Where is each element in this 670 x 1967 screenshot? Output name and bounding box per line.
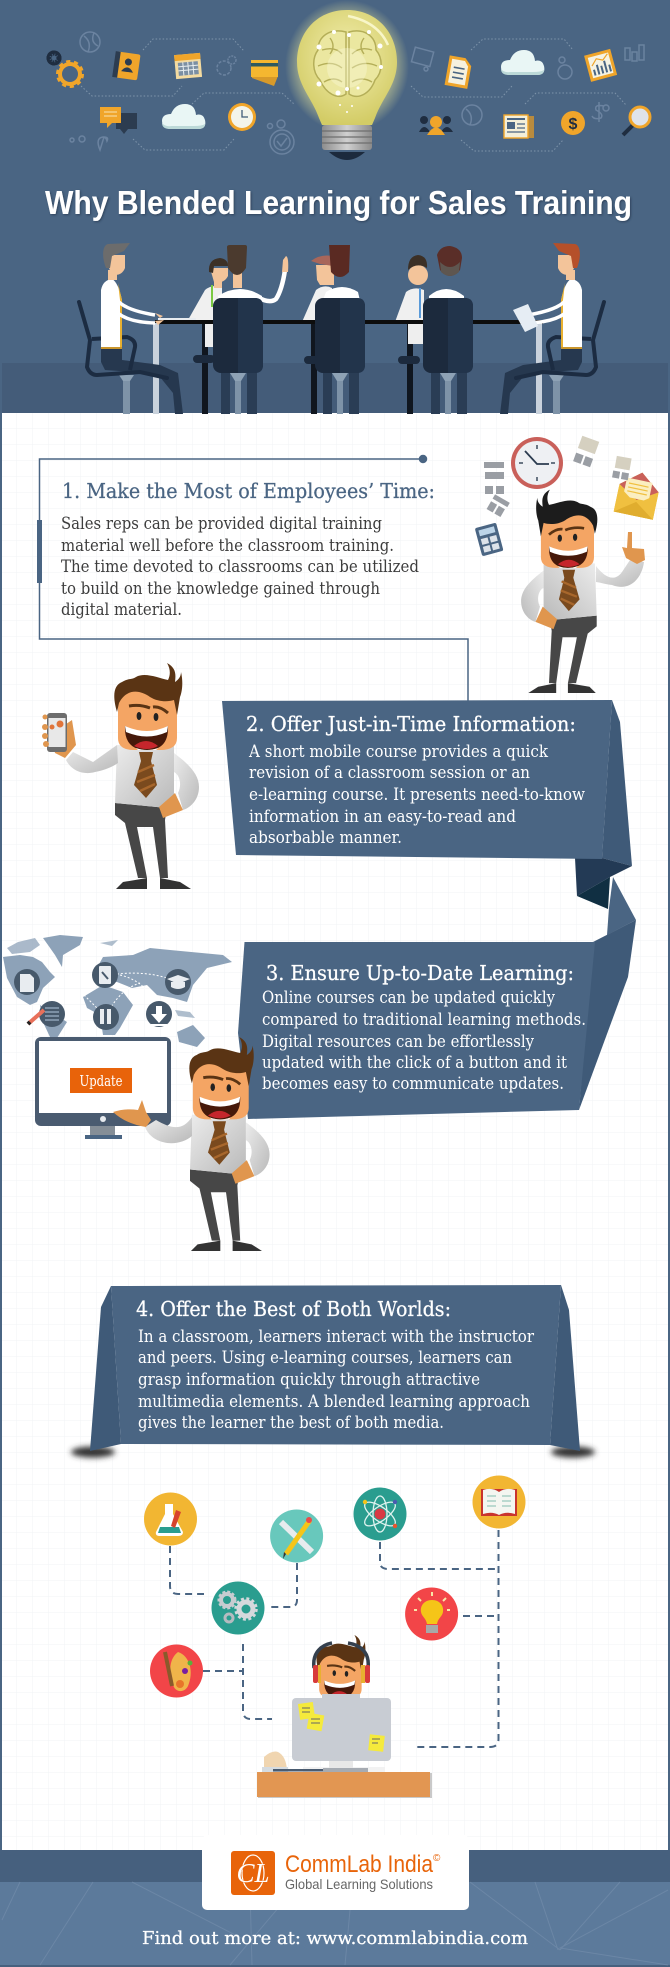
text block 2: revision of a classroom session or an — [249, 763, 530, 783]
icon: chart — [584, 49, 617, 82]
footer band — [0, 1850, 670, 1967]
icon: contact book — [112, 51, 141, 80]
text block 2: absorbable manner. — [249, 828, 402, 848]
text block 4: multimedia elements. A blended learning approach — [138, 1392, 530, 1412]
meeting person 3 — [423, 246, 473, 414]
monitor back — [292, 1698, 391, 1772]
icon: credit cards — [251, 60, 278, 86]
icon: light bulb with brain — [285, 0, 409, 160]
update button: Update — [80, 1074, 122, 1090]
text block 3: compared to traditional learning methods. — [262, 1010, 586, 1030]
text block 4: and peers. Using e-learning courses, learners can — [138, 1348, 512, 1368]
text block 4: In a classroom, learners interact with the instructor — [138, 1327, 535, 1347]
icon: CommLab logo: CL — [236, 1858, 270, 1888]
text block 2 — [248, 742, 585, 848]
heading 4: 4. Offer the Best of Both Worlds: — [136, 1297, 451, 1321]
icon: clock — [228, 103, 256, 131]
icon: cloud — [162, 104, 205, 129]
people behind table — [188, 255, 428, 414]
monitor — [35, 1037, 171, 1139]
icon: idea bulb — [405, 1588, 458, 1640]
dashed connectors — [170, 1530, 498, 1747]
icon: people — [419, 116, 453, 135]
seated man left — [79, 243, 183, 414]
icon: flask — [144, 1492, 197, 1546]
icon: envelope — [614, 468, 662, 520]
text block 3 — [262, 988, 586, 1094]
icon: dollar coin: $ — [569, 116, 578, 133]
heading 3: 3. Ensure Up-to-Date Learning: — [266, 961, 574, 985]
text block 2: information in an easy-to-read and — [249, 807, 516, 827]
icon: palette — [150, 1644, 203, 1698]
icon: dollar coin — [561, 111, 585, 135]
icon: atom — [354, 1488, 406, 1540]
text block 1: digital material. — [61, 600, 182, 620]
dotted connectors — [81, 39, 626, 151]
tagline: Global Learning Solutions — [285, 1876, 433, 1892]
registered mark: © — [433, 1853, 441, 1864]
text block 1: to build on the knowledge gained through — [61, 579, 380, 599]
icon: magnifier — [623, 107, 650, 135]
text block 2: e-learning course. It presents need-to-know — [249, 785, 585, 805]
icon: flow diagrams — [484, 436, 632, 518]
character: man with phone — [42, 663, 199, 889]
text block 4 — [138, 1327, 535, 1433]
text block 1: material well before the classroom training. — [61, 536, 394, 556]
text block 3: Digital resources can be effortlessly — [262, 1032, 534, 1052]
icon: newspaper — [504, 115, 534, 138]
desk — [257, 1772, 432, 1798]
text block 3: becomes easy to communicate updates. — [262, 1074, 564, 1094]
character: man pointing at monitor — [113, 1037, 270, 1251]
seated man right — [500, 243, 604, 414]
meeting person 2 — [315, 245, 365, 414]
icon: calculator — [475, 523, 504, 556]
text block 4: gives the learner the best of both media. — [138, 1413, 444, 1433]
brand name: CommLab India — [285, 1851, 434, 1878]
table — [153, 318, 543, 414]
text block 1 — [61, 514, 419, 620]
text block 1: The time devoted to classrooms can be utilized — [61, 557, 419, 577]
panel 2 banner — [222, 700, 636, 935]
world map with icons — [3, 935, 232, 1047]
panel: header — [0, 0, 670, 414]
meeting person 1 — [213, 245, 288, 414]
icon: open book — [472, 1476, 526, 1528]
text block 3: updated with the click of a button and it — [262, 1053, 567, 1073]
character: man with raised finger — [521, 490, 645, 693]
text block 3: Online courses can be updated quickly — [262, 988, 555, 1008]
heading 1: 1. Make the Most of Employees’ Time: — [62, 479, 435, 503]
icon: wrench and pencil — [270, 1510, 323, 1562]
illustration: floating office icons — [475, 436, 662, 556]
meeting table scene — [79, 243, 604, 414]
panel 1 frame — [37, 456, 468, 701]
text block 4: grasp information quickly through attractive — [138, 1370, 480, 1390]
heading 2: 2. Offer Just-in-Time Information: — [246, 712, 576, 736]
icon: document — [445, 55, 472, 89]
logo card — [202, 1835, 469, 1910]
icon: calendar — [174, 53, 202, 79]
panel 4 banner — [71, 1285, 595, 1458]
icon: cloud right — [501, 50, 544, 75]
icon: wall clock — [511, 437, 563, 489]
icon: gears circle — [212, 1582, 264, 1634]
panel 3 banner — [238, 920, 636, 1119]
hand on keyboard — [262, 1752, 323, 1772]
text block 1: Sales reps can be provided digital training — [61, 514, 382, 534]
ghost background icons — [70, 32, 644, 154]
icon: chat bubbles — [100, 107, 137, 134]
title: Why Blended Learning for Sales Training — [45, 184, 632, 221]
icon: CommLab logo — [231, 1851, 275, 1895]
footer link text: Find out more at: www.commlabindia.com — [142, 1928, 528, 1949]
character: man at desk with headset — [257, 1635, 432, 1798]
icon: gears — [48, 52, 82, 86]
text block 2: A short mobile course provides a quick — [248, 742, 549, 762]
